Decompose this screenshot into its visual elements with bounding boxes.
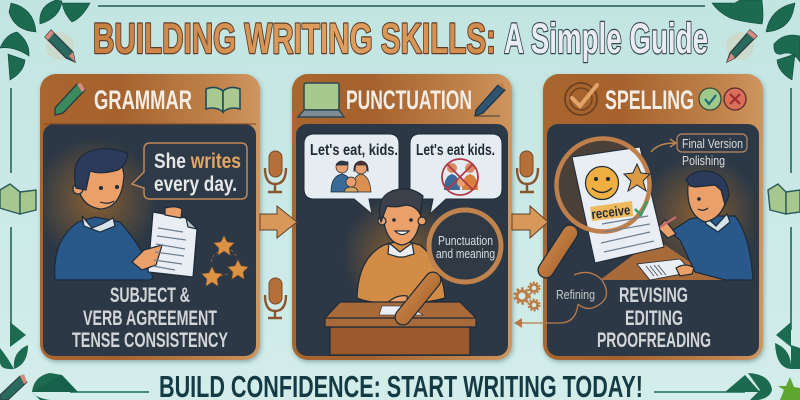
illustration: teacher at desk bbox=[325, 189, 476, 355]
magnifier: punctuation and meaning: Punctuation bbox=[438, 233, 493, 248]
speech bubble: with comma: Let's eat, kids. bbox=[310, 142, 398, 159]
callout: final version: Polishing bbox=[682, 153, 725, 168]
speech bubble: every day. bbox=[154, 173, 237, 196]
icon: pencil bbox=[55, 83, 85, 115]
icon: pencil top right bbox=[726, 30, 757, 62]
text: spelling topics: EDITING bbox=[625, 307, 683, 330]
illustration: student revising bbox=[600, 171, 753, 280]
icon: family bbox=[331, 161, 371, 192]
icon: laptop bbox=[298, 83, 344, 117]
leaves: top right bbox=[712, 0, 800, 80]
glow behind person bbox=[652, 160, 755, 262]
title: BUILDING WRITING SKILLS: bbox=[93, 15, 496, 63]
icon: pen bbox=[475, 82, 505, 116]
icon: microphone 2 bbox=[265, 278, 286, 318]
text: spelling topics: PROOFREADING bbox=[597, 329, 711, 352]
panel: grammar bbox=[33, 74, 260, 360]
text: grammar topics: TENSE CONSISTENCY bbox=[72, 329, 228, 352]
text: spelling topics: REVISING bbox=[619, 284, 688, 307]
icon: book left bbox=[0, 184, 36, 214]
icon: book right bbox=[768, 184, 800, 214]
text: grammar topics: VERB AGREEMENT bbox=[83, 307, 217, 330]
icon: check badge bbox=[565, 83, 597, 115]
icon: crossed family bbox=[442, 159, 478, 195]
leaves: bottom left bbox=[32, 373, 78, 400]
magnifier: document with receive bbox=[546, 138, 664, 270]
text: grammar topics: SUBJECT & bbox=[110, 284, 190, 307]
arrow: refining back bbox=[514, 318, 522, 328]
heading: punctuation: PUNCTUATION bbox=[346, 85, 472, 115]
arrow: grammar to punctuation bbox=[260, 206, 297, 238]
leaves: top left bbox=[0, 0, 90, 80]
icon: three stars bbox=[202, 236, 248, 286]
magnifier: punctuation and meaning bbox=[403, 210, 501, 317]
text: spelling topics bbox=[597, 284, 711, 352]
callout: refining loop bbox=[518, 272, 607, 323]
callout: refining loop: Refining bbox=[556, 287, 595, 302]
icon: gears bbox=[514, 282, 540, 310]
icon: open book bbox=[206, 87, 240, 112]
heading: grammar: GRAMMAR bbox=[94, 85, 192, 115]
leaves: bottom right bbox=[725, 373, 772, 400]
icon: green star bbox=[778, 377, 800, 400]
icon: check and cross bbox=[699, 88, 746, 110]
heading: spelling: SPELLING bbox=[605, 85, 694, 115]
illustration: teacher holding paper bbox=[55, 149, 197, 280]
magnifier: punctuation and meaning: and meaning bbox=[436, 246, 495, 261]
icon: microphone 1 bbox=[265, 151, 286, 192]
icon: microphone 3 bbox=[517, 151, 538, 192]
icon: pencil bottom left bbox=[0, 374, 27, 400]
leaves: left lower bbox=[0, 322, 28, 369]
callout: final version: Final Version bbox=[682, 136, 743, 151]
speech bubble: with comma bbox=[304, 134, 399, 214]
speech bubble: without comma: Let's eat kids. bbox=[416, 142, 495, 159]
glow behind person bbox=[347, 207, 446, 286]
speech bubble: She writes bbox=[154, 150, 241, 173]
panel: spelling bbox=[518, 74, 763, 360]
leaves: right lower bbox=[775, 322, 800, 369]
text: grammar topics bbox=[72, 284, 228, 352]
speech bubble: without comma bbox=[410, 134, 502, 214]
speech bubble bbox=[132, 143, 247, 199]
glow behind person bbox=[43, 144, 152, 244]
arrow: punctuation to spelling bbox=[512, 206, 548, 238]
icon: pencil top left bbox=[45, 30, 75, 62]
magnifier: document with receive: receive bbox=[591, 202, 631, 222]
callout: final version bbox=[651, 134, 747, 168]
panel: punctuation bbox=[292, 74, 512, 360]
